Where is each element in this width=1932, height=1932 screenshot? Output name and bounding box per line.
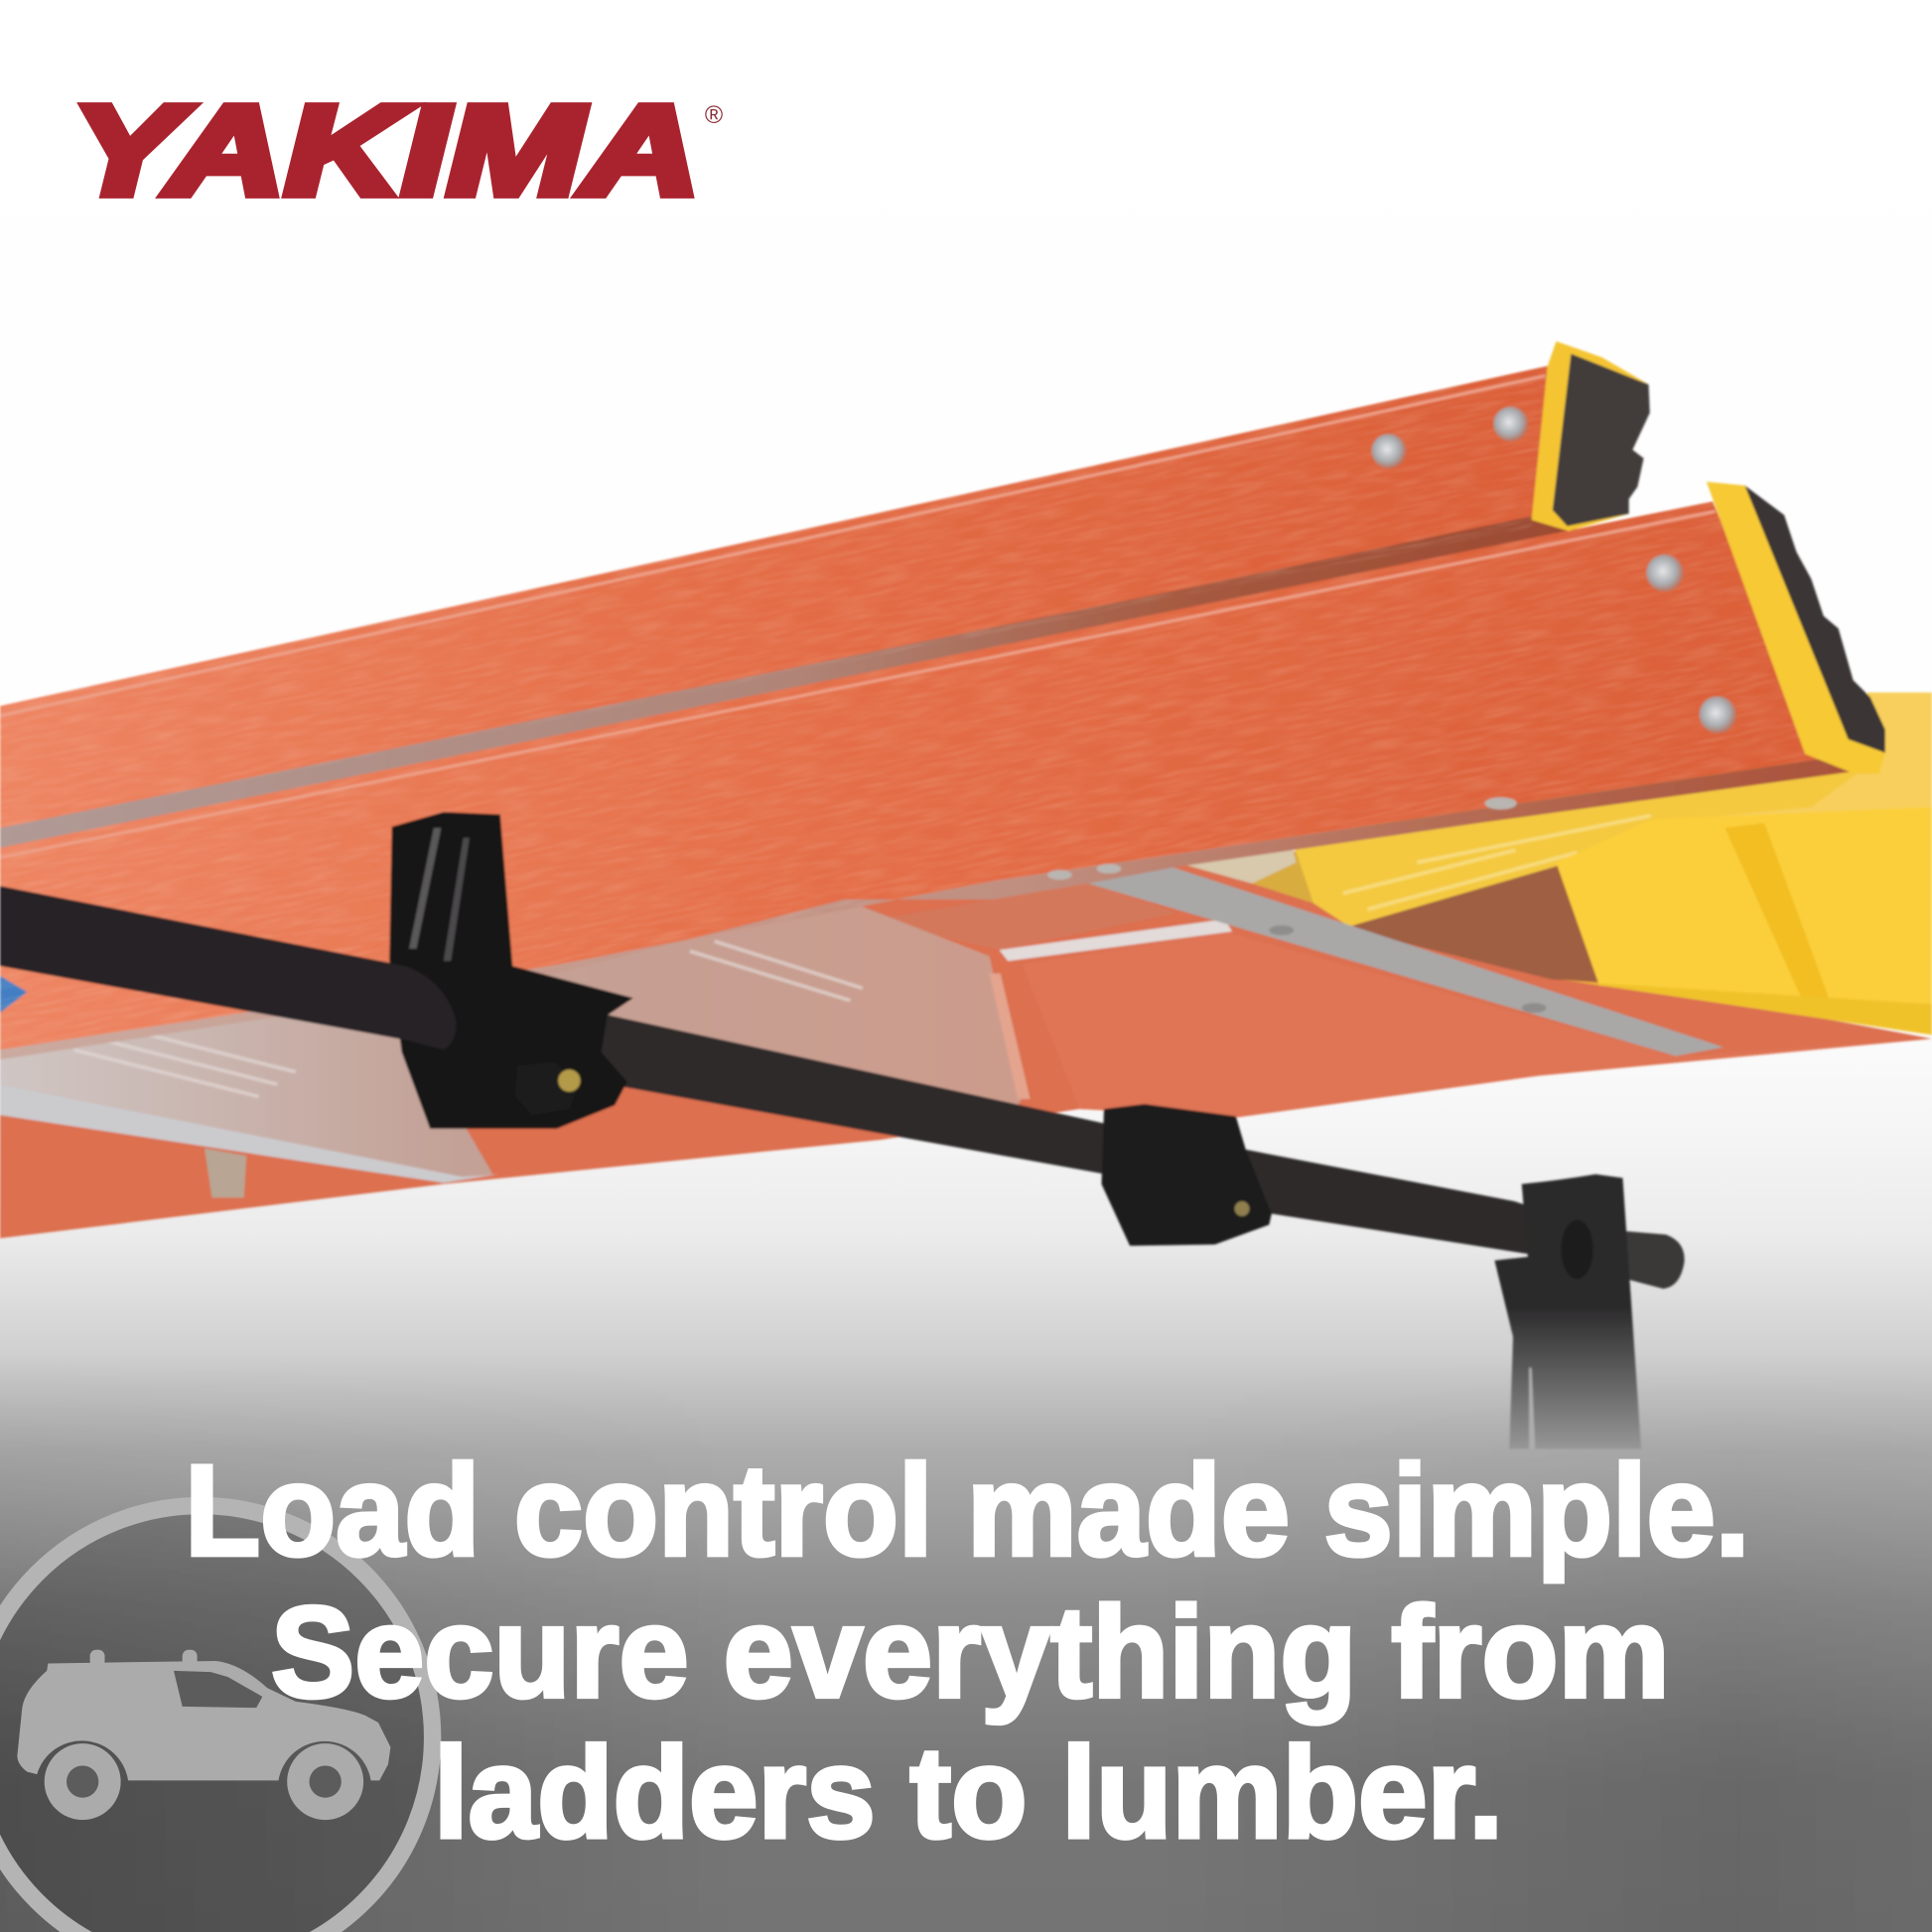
- rail texture: [0, 369, 1805, 1042]
- silver brace: [1088, 868, 1724, 1056]
- rail top highlights: [0, 376, 1716, 858]
- gap between rails: [0, 511, 1578, 850]
- logo: Yakima: YAKIMA: [71, 79, 700, 221]
- rear rung: [870, 884, 1176, 950]
- circle badge: [0, 1506, 433, 1932]
- nut: [515, 1062, 579, 1115]
- yellow ladder parts: [1176, 692, 1932, 1035]
- bolt end: [558, 1069, 581, 1092]
- headline: Load control made simple.: [185, 1438, 1749, 1583]
- silver rung strip: [1000, 919, 1232, 961]
- front end cap: [1707, 482, 1885, 773]
- first clamp: [389, 812, 633, 1129]
- windows and hubs: [67, 1671, 342, 1798]
- icon: vehicle in circle: [0, 1506, 433, 1932]
- blue sticker: [0, 976, 27, 1013]
- front rail rim: [0, 759, 1855, 1059]
- background edge shading: [0, 1439, 1932, 1932]
- lower ladder rail: [0, 850, 1932, 1238]
- small metal bracket: [205, 1149, 246, 1197]
- logo: Yakima: ®: [705, 102, 723, 129]
- headline: ladders to lumber.: [434, 1720, 1503, 1864]
- front ladder rail: [0, 501, 1820, 1049]
- bar stand and end cap: [1494, 1174, 1685, 1449]
- vehicle silhouette: [17, 1650, 390, 1820]
- aluminium tread: [0, 899, 1031, 1182]
- photo: ladder on roof rack: [0, 340, 1932, 1449]
- headline: [185, 1438, 1749, 1864]
- crossbar left of first clamp: [0, 886, 457, 1049]
- second clamp: [1102, 1104, 1272, 1246]
- crossbar right of first clamp: [542, 1001, 1553, 1259]
- dark recess behind tray: [1313, 863, 1601, 982]
- headline: Secure everything from: [271, 1580, 1670, 1725]
- lower rail red face: [1022, 932, 1932, 1118]
- rivets: [1047, 407, 1736, 1013]
- upper end cap: [1532, 342, 1650, 531]
- upper ladder rail: [0, 366, 1548, 850]
